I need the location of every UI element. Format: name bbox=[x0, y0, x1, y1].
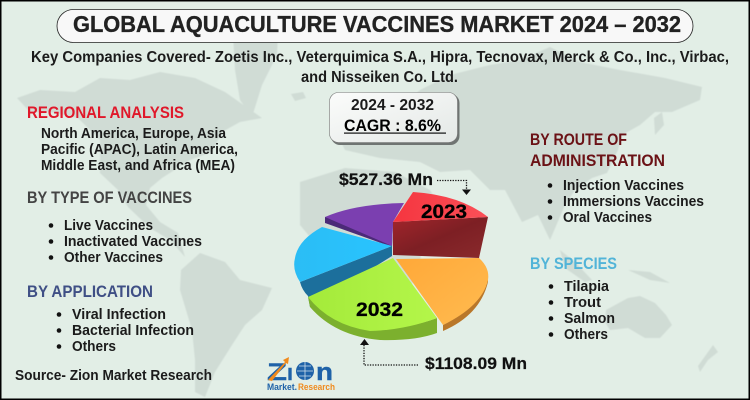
list: Salmon bbox=[564, 311, 615, 327]
callout: 2023 value bbox=[339, 170, 471, 195]
list: Live Vaccines bbox=[64, 218, 153, 234]
callout: 2032 value bbox=[360, 339, 527, 373]
list: Inactivated Vaccines bbox=[64, 234, 202, 250]
heading bbox=[530, 131, 665, 170]
label 2023: 2023 bbox=[421, 202, 467, 223]
heading: BY ROUTE OF bbox=[530, 131, 627, 149]
logo: Zion Market Research bbox=[267, 357, 335, 392]
regions text: Pacific (APAC), Latin America, bbox=[41, 142, 238, 158]
list: Tilapia bbox=[564, 279, 610, 295]
logo: Zion Market Research: ı bbox=[287, 360, 293, 385]
panel: by type of vaccines bbox=[27, 189, 202, 266]
label 2032: 2032 bbox=[356, 300, 403, 321]
list: Oral Vaccines bbox=[563, 210, 652, 226]
panel: by species bbox=[530, 255, 617, 343]
Research: Research bbox=[298, 382, 335, 392]
list: Viral Infection bbox=[72, 307, 166, 323]
list bbox=[57, 307, 194, 355]
list: Immersions Vaccines bbox=[563, 194, 704, 210]
heading: BY SPECIES bbox=[530, 255, 617, 273]
heading: BY APPLICATION bbox=[27, 283, 153, 301]
list: Others bbox=[564, 327, 608, 343]
list bbox=[549, 279, 615, 343]
heading: BY TYPE OF VACCINES bbox=[27, 189, 192, 207]
panel: by application bbox=[27, 283, 194, 355]
key companies bbox=[31, 49, 729, 86]
list bbox=[548, 178, 704, 226]
list: Injection Vaccines bbox=[563, 178, 684, 194]
title text: GLOBAL AQUACULTURE VACCINES MARKET 2024 – 2032 bbox=[73, 11, 681, 37]
callout: 2023 value: $527.36 Mn bbox=[339, 170, 433, 189]
panel: regional analysis bbox=[27, 104, 238, 174]
wordmark Zi: Z bbox=[267, 359, 287, 386]
list bbox=[49, 218, 202, 266]
globe bbox=[296, 362, 314, 380]
orange arrow bbox=[268, 357, 289, 381]
list: Trout bbox=[564, 295, 601, 311]
callout: 2032 value: $1108.09 Mn bbox=[425, 354, 527, 373]
slice: purple bbox=[325, 203, 404, 247]
heading: ADMINISTRATION bbox=[530, 152, 665, 170]
panel: by route of administration bbox=[530, 131, 704, 226]
heading: REGIONAL ANALYSIS bbox=[27, 104, 184, 122]
CAGR box bbox=[330, 92, 460, 145]
source: Source- Zion Market Research bbox=[15, 368, 212, 384]
slice: red bbox=[393, 192, 488, 258]
CAGR box: 2024 - 2032 bbox=[351, 97, 434, 114]
title pill bbox=[57, 10, 693, 42]
key companies: Key Companies Covered- Zoetis Inc., Veterquimica S.A., Hipra, Tecnovax, Merck & Co., Inc., Virbac, bbox=[31, 49, 729, 66]
regions text bbox=[41, 126, 238, 174]
CAGR box: CAGR : 8.6% bbox=[344, 116, 441, 135]
3D pie chart bbox=[294, 192, 488, 340]
title bbox=[57, 10, 693, 42]
list: Bacterial Infection bbox=[72, 323, 194, 339]
regions text: Middle East, and Africa (MEA) bbox=[41, 158, 235, 174]
regions text: North America, Europe, Asia bbox=[41, 126, 227, 142]
key companies: and Nisseiken Co. Ltd. bbox=[301, 69, 458, 86]
list: Others bbox=[72, 339, 116, 355]
slice: blue bbox=[294, 227, 392, 307]
list: Other Vaccines bbox=[64, 250, 163, 266]
slice: green bbox=[308, 258, 437, 340]
wordmark n: n bbox=[316, 359, 333, 386]
Market: Market. bbox=[267, 382, 297, 392]
slice: orange bbox=[396, 258, 488, 331]
